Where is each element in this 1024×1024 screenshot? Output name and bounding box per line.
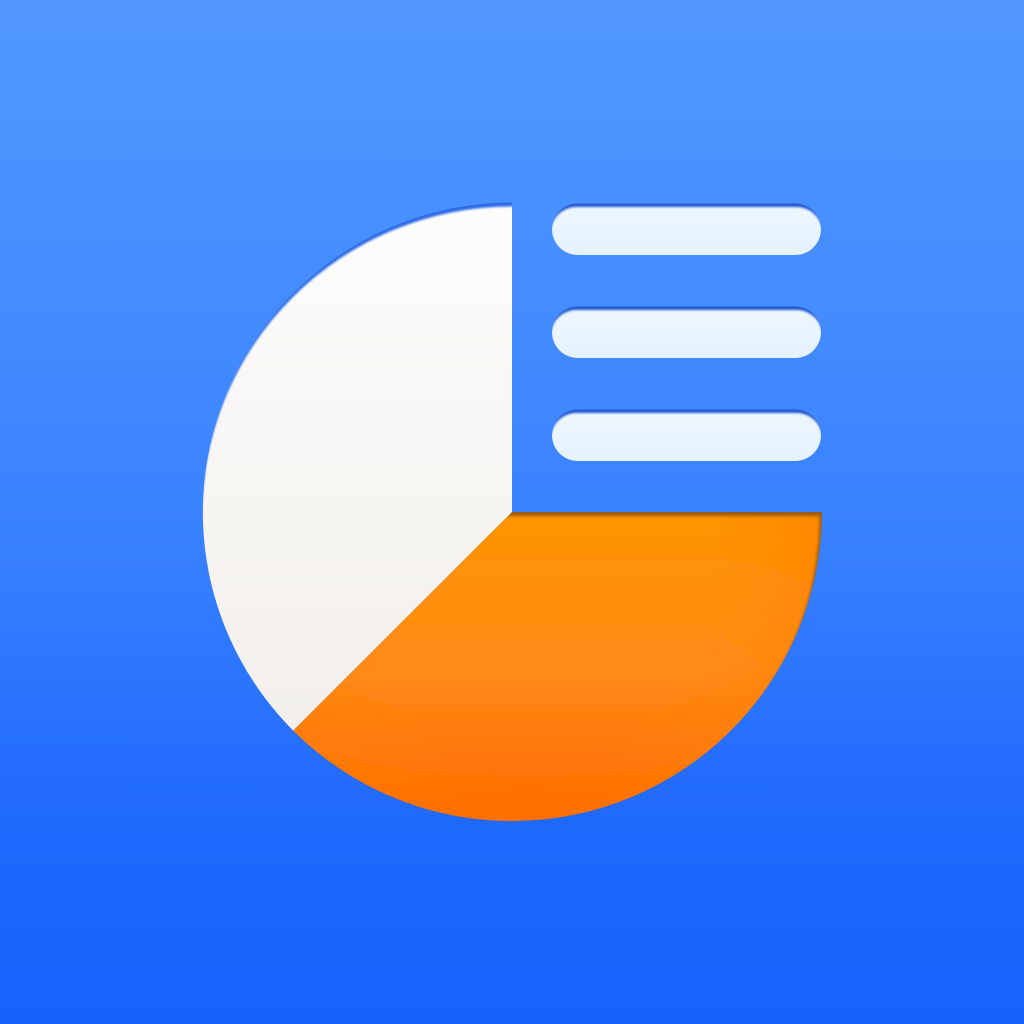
legend bars: [550, 203, 822, 465]
pie chart: [190, 195, 830, 830]
legend bar 2: [550, 306, 822, 362]
legend bar 3: [550, 409, 822, 465]
pie slice: white: [202, 202, 512, 732]
legend bar 1: [550, 203, 822, 259]
pie slice: orange: [293, 512, 822, 821]
